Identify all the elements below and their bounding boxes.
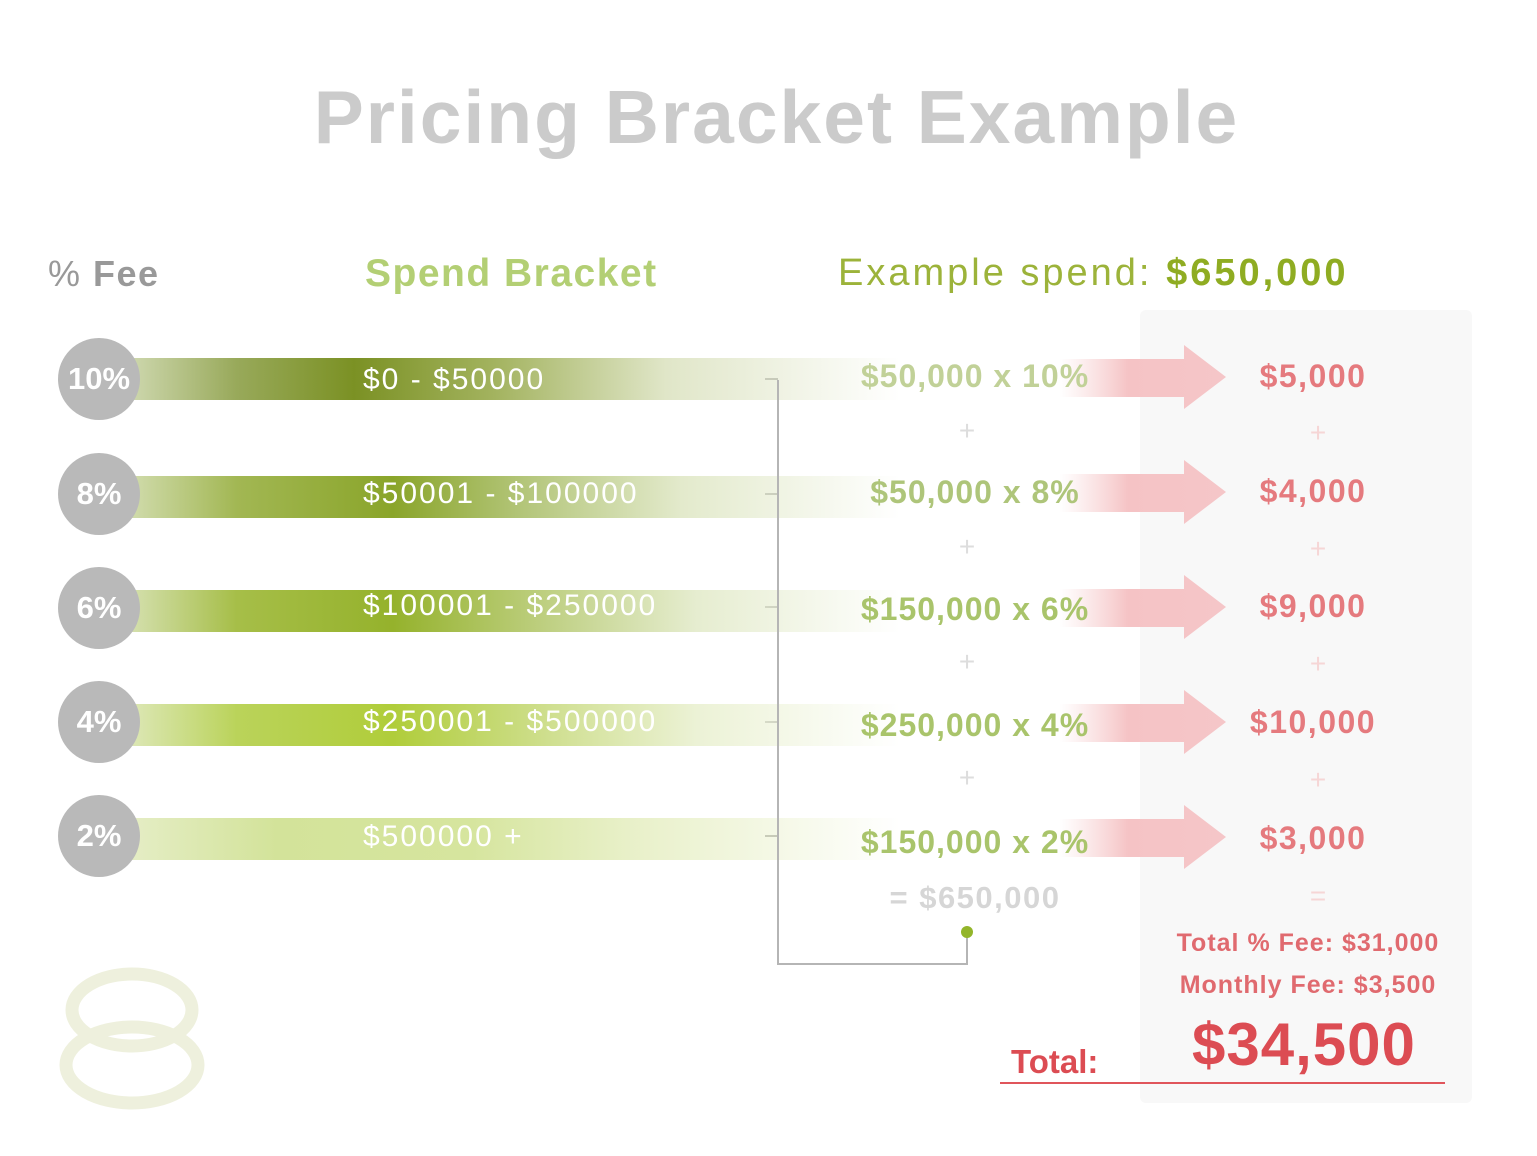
text: + [1310, 417, 1326, 448]
text: + [1310, 648, 1326, 679]
text: $4,000 [1260, 473, 1366, 509]
text: + [959, 531, 975, 562]
row 5 [58, 795, 860, 877]
row 1 [58, 338, 866, 420]
text: 6% [77, 590, 121, 625]
heading: example spend: Example spend: $650,000 [838, 252, 1349, 294]
calculations [134, 358, 1089, 915]
results [134, 358, 1376, 911]
text: = $650,000 [889, 880, 1060, 915]
fee summary: Monthly Fee: $3,500 [1180, 971, 1436, 999]
text: 2% [77, 818, 121, 853]
text: $500000 + [363, 820, 524, 853]
text: + [959, 646, 975, 677]
text: $3,000 [1260, 820, 1366, 856]
text: $100001 - $250000 [363, 589, 657, 622]
text: = [1310, 880, 1326, 911]
text: + [959, 762, 975, 793]
text: $50001 - $100000 [363, 477, 639, 510]
text: $150,000 x 6% [861, 591, 1089, 627]
text: $250,000 x 4% [861, 707, 1089, 743]
text: + [1310, 533, 1326, 564]
heading: spend bracket: Spend Bracket [365, 252, 658, 295]
text: $150,000 x 2% [861, 824, 1089, 860]
text: $250001 - $500000 [363, 705, 657, 738]
text: + [959, 415, 975, 446]
row 3 [58, 567, 864, 649]
total [1000, 1010, 1445, 1084]
total: Total: [1011, 1043, 1098, 1080]
title: Pricing Bracket Example [314, 75, 1239, 159]
fee summary [1176, 929, 1439, 999]
heading: % Fee: % Fee [48, 253, 160, 294]
text: $9,000 [1260, 588, 1366, 624]
total: $34,500 [1192, 1011, 1416, 1078]
text: $50,000 x 8% [870, 474, 1080, 510]
ticks [765, 378, 778, 837]
text: 10% [68, 361, 130, 396]
text: + [1310, 764, 1326, 795]
text: $50,000 x 10% [861, 358, 1089, 394]
row 2 [58, 453, 866, 535]
fee summary: Total % Fee: $31,000 [1177, 929, 1439, 957]
text: 4% [77, 704, 121, 739]
text: $5,000 [1260, 358, 1366, 394]
row 4 [58, 681, 860, 763]
text: $10,000 [1250, 704, 1376, 740]
text: $0 - $50000 [363, 363, 545, 396]
logo [60, 968, 204, 1110]
text: 8% [77, 476, 121, 511]
panel: results background [1140, 310, 1472, 1103]
